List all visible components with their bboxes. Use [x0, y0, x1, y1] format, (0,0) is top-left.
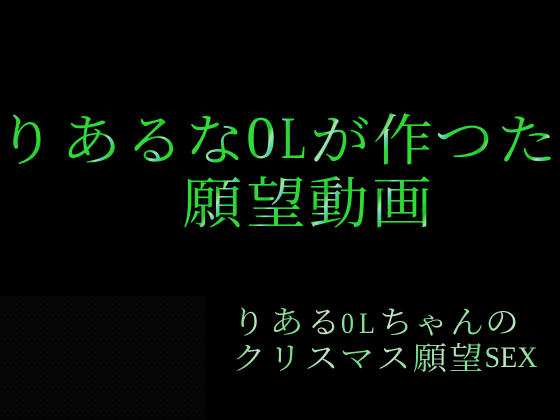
- subtitle line 1 latin: [341, 307, 375, 340]
- title line 1 latin: 0: [246, 105, 276, 171]
- subtitle line 2 kana and kanji: クリスマス願望: [232, 341, 483, 377]
- subtitle: [232, 306, 538, 377]
- subtitle line 2 latin: SEX: [484, 341, 538, 374]
- title line 2: 願望動画: [182, 173, 432, 236]
- subtitle line 1 kana: りあるちゃんの: [232, 306, 519, 341]
- title line 1 latin: L: [281, 105, 307, 171]
- subtitle line 1 latin: 0: [341, 307, 354, 340]
- main title: [0, 105, 557, 236]
- title line 1 latin: [246, 105, 307, 171]
- dark noise panel: [0, 296, 206, 420]
- subtitle line 1 latin: L: [359, 307, 375, 340]
- title line 1 kana and kanji: りあるなが作つた: [0, 110, 557, 173]
